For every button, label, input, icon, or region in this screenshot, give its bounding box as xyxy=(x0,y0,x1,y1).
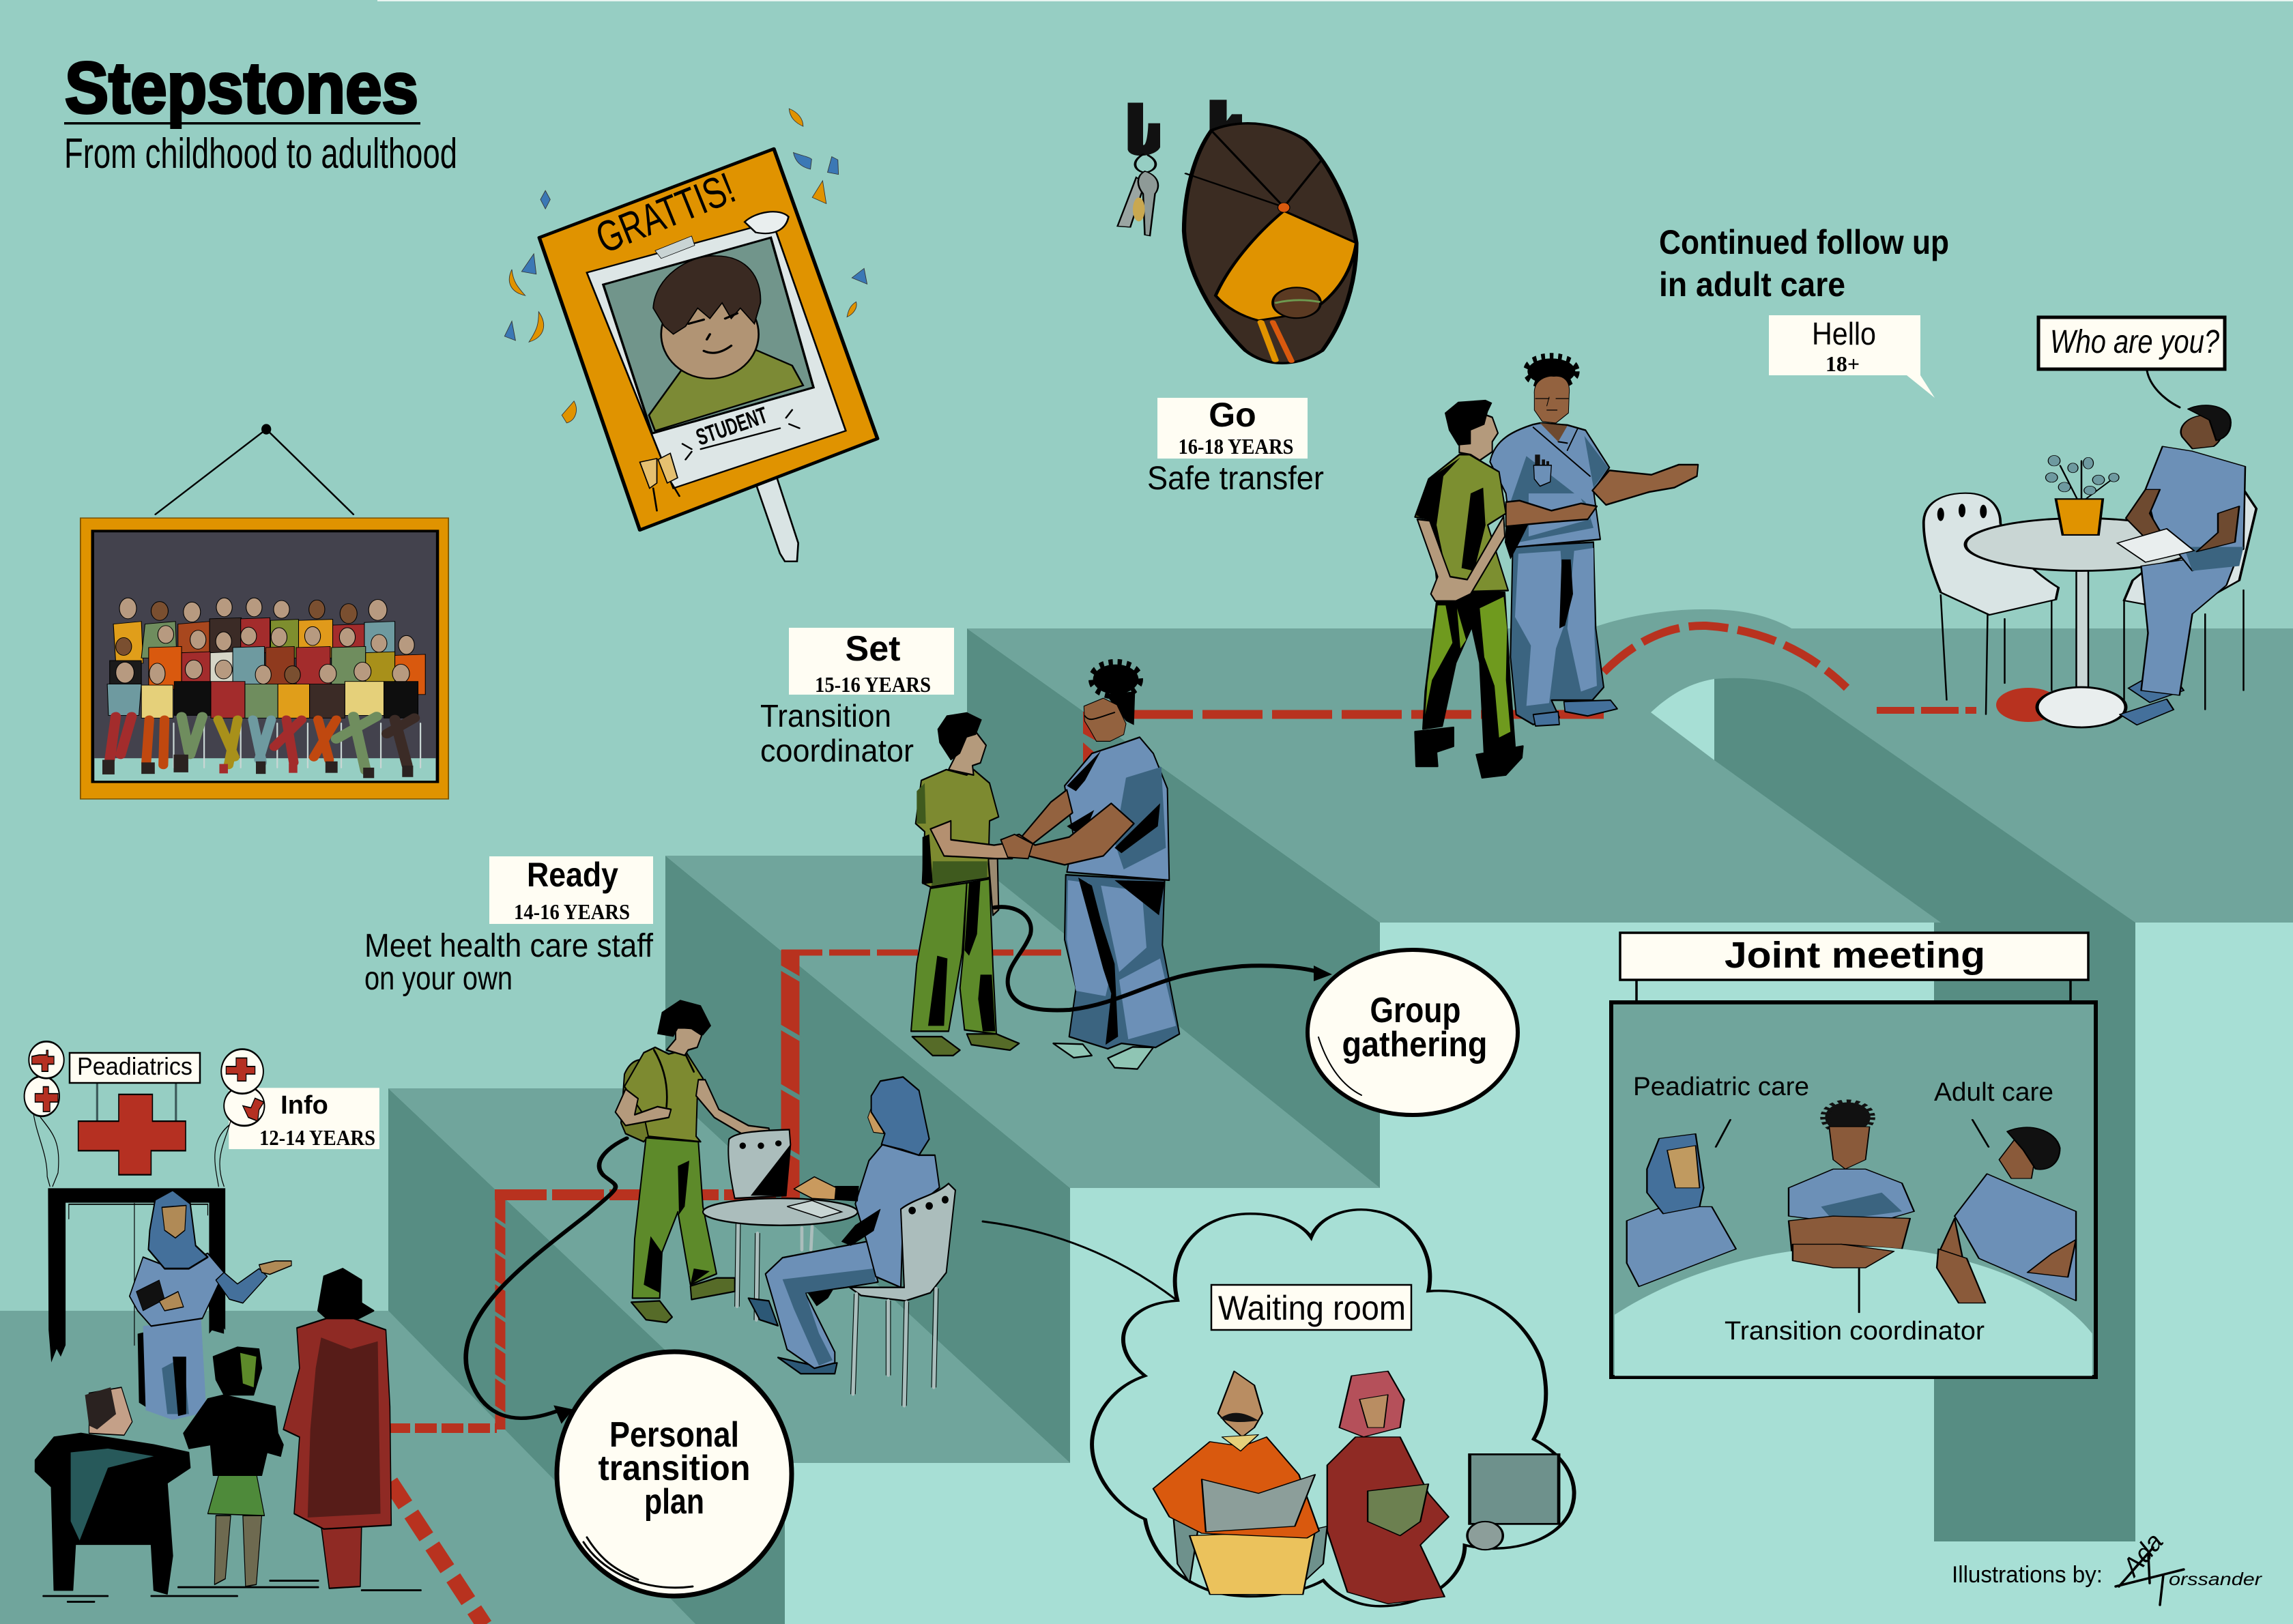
waiting room cloud xyxy=(1092,1210,1574,1606)
joint meeting sign: Joint meeting xyxy=(1725,935,1985,976)
balloons xyxy=(25,1041,264,1187)
black doorway xyxy=(48,1188,225,1363)
meeting room frame xyxy=(1611,1002,2096,1377)
text: Set label xyxy=(789,628,954,697)
signature: orssander xyxy=(2169,1569,2263,1589)
text: Transition coordinator xyxy=(760,698,914,768)
nurse chair xyxy=(850,1183,955,1406)
subtitle: From childhood to adulthood xyxy=(64,130,457,177)
bubble: Personal transition plan: Personal xyxy=(609,1415,739,1455)
text: Ready label: 14-16 YEARS xyxy=(514,899,630,924)
paper xyxy=(2117,529,2194,562)
seated nurse xyxy=(2120,405,2245,725)
class photo shoes xyxy=(102,755,413,778)
red path line xyxy=(388,626,2060,1624)
text: Meet health care staff: on your own xyxy=(364,961,513,997)
left chair xyxy=(1924,493,2058,714)
text: Waiting room: Waiting room xyxy=(1218,1289,1406,1327)
cafe table with adult care nurse xyxy=(1924,405,2256,727)
text: Peadiatrics sign: Peadiatrics xyxy=(77,1052,192,1080)
youth with backpack xyxy=(616,1000,771,1322)
figures: Ready, youth and nurse at table xyxy=(616,1000,955,1406)
champagne glasses xyxy=(640,453,680,510)
woman with book xyxy=(1327,1371,1449,1604)
coordinator nurse xyxy=(1001,665,1179,1069)
seated nurse in hijab xyxy=(749,1077,940,1374)
connector to waiting room cloud xyxy=(983,1221,1177,1301)
text: Illustrations by: Illustrations by: xyxy=(1952,1562,2103,1588)
meeting participants xyxy=(1615,1102,2092,1376)
arrow tip to group gathering xyxy=(1314,966,1332,981)
red cross sign xyxy=(78,1084,186,1175)
class photo chair legs xyxy=(146,723,420,768)
joint meeting sign xyxy=(1620,933,2088,1001)
text: Go label: Go xyxy=(1209,396,1256,434)
class photo legs xyxy=(110,716,414,770)
class photo people xyxy=(107,598,425,718)
text: Transition coordinator: Transition coordinator xyxy=(1725,1317,1985,1346)
speech bubble: Who are you? xyxy=(2038,317,2225,407)
text: Transition coordinator: coordinator xyxy=(760,733,914,768)
text: Meet health care staff: Meet health care staff xyxy=(364,928,654,964)
title: Stepstones xyxy=(65,48,418,128)
bubble: Group gathering xyxy=(1308,950,1518,1115)
bubble: Group gathering: Group xyxy=(1370,991,1460,1030)
graduation sign: Grattis xyxy=(539,149,878,562)
person in wheelchair xyxy=(35,1387,190,1594)
black connector to group gathering xyxy=(994,907,1323,1011)
curly hair xyxy=(1093,665,1138,694)
figures: Go, youth and transition coordinator xyxy=(1415,358,1698,778)
hat and keys on hooks xyxy=(1118,100,1357,363)
text: Set label: 15-16 YEARS xyxy=(815,672,931,697)
boy xyxy=(911,712,1019,1056)
potted plant xyxy=(2046,456,2119,535)
framed class photo xyxy=(81,424,448,799)
text: Peadiatric care: Peadiatric care xyxy=(1633,1073,1809,1101)
signature xyxy=(2116,1528,2263,1605)
child xyxy=(184,1347,283,1586)
signature: Ada xyxy=(2116,1528,2169,1582)
bubble: Group gathering: gathering xyxy=(1342,1025,1488,1064)
text: Go label xyxy=(1157,396,1308,459)
text: Go label: 16-18 YEARS xyxy=(1178,434,1294,459)
woman in red coat xyxy=(283,1268,391,1589)
man in wheelchair xyxy=(1153,1371,1327,1595)
nurse in scrubs, gesturing xyxy=(1490,358,1698,726)
right chair xyxy=(2124,489,2256,710)
speech bubble: Hello 18+: 18+ xyxy=(1826,351,1860,376)
text: Transition coordinator: Transition xyxy=(760,698,891,734)
text: Info label xyxy=(259,1091,375,1150)
table and chair xyxy=(703,1129,858,1320)
handshake xyxy=(1001,835,1033,858)
text: Ready label: Ready xyxy=(527,856,618,894)
text: Ready label xyxy=(489,856,653,924)
panel: Joint meeting xyxy=(1611,933,2096,1377)
text: STUDENT: STUDENT xyxy=(693,402,771,451)
cap xyxy=(1184,124,1357,363)
bubble: Personal transition plan: plan xyxy=(644,1482,704,1522)
bubble: Personal transition plan xyxy=(557,1352,792,1596)
table stand xyxy=(1965,518,2197,727)
speech bubble: Who are you?: Who are you? xyxy=(2050,324,2219,360)
keys xyxy=(1118,154,1158,236)
bubble: Personal transition plan: transition xyxy=(598,1449,751,1488)
text: Continued follow up xyxy=(1659,223,1949,304)
figures: Set, boy and coordinator shaking hands xyxy=(911,665,1179,1069)
text: Meet health care staff xyxy=(364,928,654,997)
ground shadow strokes xyxy=(43,1581,421,1601)
speech bubble: Hello 18+ xyxy=(1769,315,1935,398)
nurse in hijab at door xyxy=(130,1190,291,1420)
info label xyxy=(229,1088,379,1149)
text: Info label: Info xyxy=(280,1091,328,1120)
arms over table xyxy=(1793,1244,1985,1303)
pediatrics entrance with group xyxy=(25,1041,421,1601)
text: Continued follow up: Continued follow up xyxy=(1659,223,1949,261)
curly hair xyxy=(1527,358,1575,384)
black connector to personal transition plan xyxy=(466,1138,626,1424)
empty seat xyxy=(1467,1454,1559,1550)
youth seen from behind xyxy=(1415,400,1523,778)
text: Info label: 12-14 YEARS xyxy=(259,1125,375,1150)
text: Continued follow up: in adult care xyxy=(1659,265,1845,304)
portrait of boy xyxy=(649,256,803,431)
text: Set label: Set xyxy=(846,629,900,669)
hooks xyxy=(1127,100,1242,156)
text: Safe transfer: Safe transfer xyxy=(1147,461,1324,497)
speech bubble: Hello 18+: Hello xyxy=(1812,316,1876,351)
confetti xyxy=(504,108,867,423)
text: Adult care: Adult care xyxy=(1934,1078,2053,1107)
text: GRATTIS!: GRATTIS! xyxy=(589,163,742,263)
